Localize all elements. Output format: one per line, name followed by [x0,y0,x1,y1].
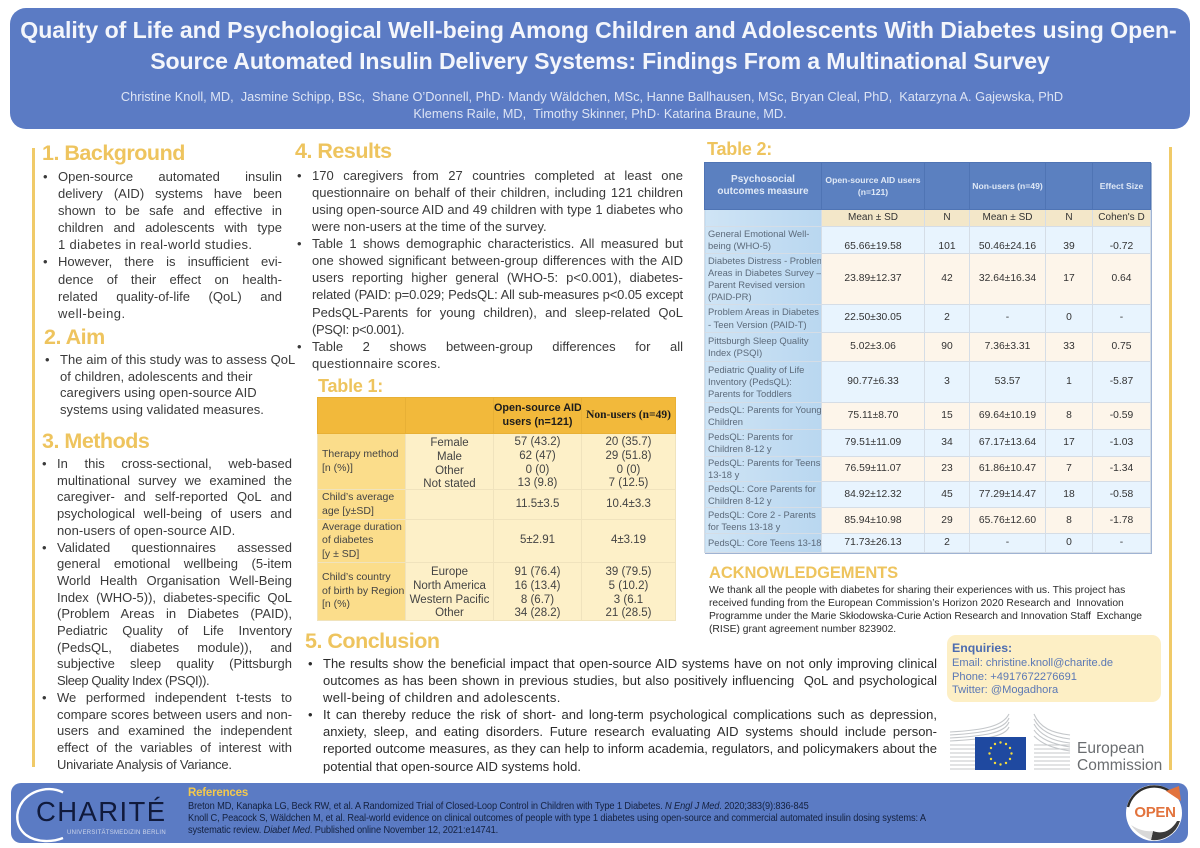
table 2: psychosocial outcomes: 7 [1066,463,1072,474]
table 2: psychosocial outcomes: 101 [938,241,956,252]
table 2: psychosocial outcomes: 8 [1066,410,1072,421]
logo: Charité: UNIVERSITÄTSMEDIZIN BERLIN [67,830,166,836]
table 2: psychosocial outcomes: -0.58 [1110,489,1133,500]
table 1: demographics: 13 (9.8) [518,477,557,489]
table 1: demographics: [n (%) [322,598,350,610]
table 2: psychosocial outcomes: 3 [944,376,950,387]
text: reference list: Breton MD, Kanapka LG, Beck RW, et al. A Randomized Trial of Closed-Loop Control in Children with Type 1 Diabetes. N Engl J Med. 2020;383(9):836-845 [188,800,809,812]
table 2: psychosocial outcomes: 34 [941,437,953,448]
text: aim bullet: systems using validated measures. [60,402,264,417]
table 2: psychosocial outcomes: 69.64±10.19 [979,410,1036,421]
table 2: psychosocial outcomes: - [1006,312,1009,323]
table 2: psychosocial outcomes: Diabetes Distress - Problem [708,255,822,266]
table 2: psychosocial outcomes: 79.51±11.09 [845,437,901,448]
table 2: psychosocial outcomes: PedsQL: Core Teens 13-18 [708,537,821,548]
table 2: psychosocial outcomes: 84.92±12.32 [844,489,902,500]
text: methods bullets: Validated questionnaires assessed [57,540,292,555]
table 2: psychosocial outcomes: 77.29±14.47 [979,489,1036,500]
table 2: psychosocial outcomes [704,162,1151,553]
table 1: demographics: Europe [431,566,468,578]
text: background bullets: children and adolescents with type [58,220,282,235]
logo: European Commission: European [1077,740,1144,757]
text: methods bullets: caregiver- and self-reported QoL and [57,489,292,504]
table 2: psychosocial outcomes: - [1006,537,1009,548]
table 1: demographics: 4±3.19 [611,534,646,546]
table 2: psychosocial outcomes: 0.75 [1111,341,1132,352]
table 2: psychosocial outcomes: 17 [1063,437,1075,448]
table 2: psychosocial outcomes: Mean ± SD [848,212,898,223]
table 1: demographics: 29 (51.8) [605,450,652,462]
text: results bullets: 170 caregivers from 27 countries completed at least one [312,168,683,183]
text: results bullets: using open-source AID and 49 children with type 1 diabetes who [312,202,683,217]
logo: Charité [16,788,167,842]
table 1: demographics: 20 (35.7) [605,436,652,448]
footer banner [11,783,1188,843]
text: results bullets: were non-users at the time of the survey. [312,219,547,234]
table 2: psychosocial outcomes: Effect Size [1100,181,1143,191]
table 2: psychosocial outcomes: - [1120,312,1123,323]
text: reference list [188,800,926,836]
table 2: psychosocial outcomes: PedsQL: Core Parents for [708,483,816,494]
logo: European Commission: Commission [1077,757,1162,774]
heading: acknowledgements: ACKNOWLEDGEMENTS [709,564,898,582]
heading: Table 2: Table 2: [707,139,772,159]
text: reference list: Knoll C, Peacock S, Wäldchen M, et al. Real-world evidence on clinical outcomes of people with type 1 diabetes using open-source and commercial automated insulin dosing systems: A [188,813,926,824]
text: methods bullets: World Health Organisation Well-Being [57,573,292,588]
text: conclusion bullets: outcomes as has been shown in previous studies, but also positively influencing QoL and psychological [323,673,937,688]
table 2: psychosocial outcomes: 53.57 [995,376,1020,387]
text: background bullets: related quality-of-life (QoL) and [58,289,282,304]
table 1: demographics: Therapy method [322,448,398,460]
table 2: psychosocial outcomes: PedsQL: Parents for [708,431,793,442]
heading: 2. Aim: 2. Aim [44,325,105,349]
table 2: psychosocial outcomes: Inventory (PedsQL): [708,376,792,387]
logo: European Commission [950,714,1162,774]
table 1: demographics: Child’s country [322,571,391,583]
table 2: psychosocial outcomes: 2 [944,537,950,548]
table 2: psychosocial outcomes: 45 [941,489,953,500]
table 1: demographics: users (n=121) [503,416,572,428]
table 2: psychosocial outcomes: 33 [1063,341,1075,352]
table 2: psychosocial outcomes: -5.87 [1110,376,1133,387]
text: methods bullets: Sleep Quality Index (PSQI)). [57,673,209,688]
table 2: psychosocial outcomes: 71.73±26.13 [844,537,902,548]
text: results bullets: questionnaire scores. [312,356,441,371]
table 2: psychosocial outcomes: 15 [941,410,953,421]
table 1: demographics: Open-source AID [494,402,582,414]
table 2: psychosocial outcomes: 22.50±30.05 [844,312,902,323]
table 1: demographics: Child’s average [322,491,394,503]
table 2: psychosocial outcomes: 85.94±10.98 [844,515,902,526]
table 2: psychosocial outcomes: 23 [941,463,953,474]
text: acknowledgements: Programme under the Marie Skłodowska-Curie Action Research and Innovation Staff Exchange [709,610,1142,622]
table 2: psychosocial outcomes: 17 [1063,273,1075,284]
table 2: psychosocial outcomes: for Teens 13-18 y [708,521,780,532]
text: methods bullets [42,456,292,772]
table 2: psychosocial outcomes: Psychosocial [731,174,795,185]
table 2: psychosocial outcomes: -0.59 [1110,410,1133,421]
text: aim bullet [46,352,295,417]
table 2: psychosocial outcomes: Parent Revised version [708,279,805,290]
table 2: psychosocial outcomes: 7.36±3.31 [985,341,1030,352]
text: results bullets [298,168,683,371]
table 1: demographics: 16 (13.4) [514,580,561,592]
text: background bullets: delivery (AID) systems have been [58,186,282,201]
table 1: demographics: 8 (6.7) [521,594,554,606]
authors: Klemens Raile, MD, Timothy Skinner, PhD· Katarina Braune, MD. [413,106,787,121]
table 2: psychosocial outcomes: Cohen's D [1098,212,1145,223]
text: background bullets: However, there is insufficient evi- [58,254,282,269]
text: methods bullets: subjective sleep quality (Pittsburgh [57,656,292,671]
text: conclusion bullets [308,656,937,774]
logo: Charité: CHARITÉ [36,796,167,827]
table 2: psychosocial outcomes: 13-18 y [708,469,739,480]
text: methods bullets: non-users of open-source AID. [57,523,235,538]
table 2: psychosocial outcomes: 65.76±12.60 [979,515,1036,526]
table 2: psychosocial outcomes: 67.17±13.64 [979,437,1036,448]
table 1: demographics: [n (%)] [322,462,353,474]
table 1: demographics: Other [435,607,464,619]
table 2: psychosocial outcomes: - Teen Version (PAID-T) [708,318,807,330]
text: background bullets: well-being. [58,306,126,321]
table 2: psychosocial outcomes: PedsQL: Parents for Teens [708,457,820,468]
table 2: psychosocial outcomes: 5.02±3.06 [850,341,896,352]
logo: OPEN [1126,785,1182,841]
text: methods bullets: Index (WHO-5)), diabetes-specific QoL [57,590,292,605]
text: aim bullet: of children, adolescents and their [60,369,252,384]
text: results bullets: Table 1 shows demographic characteristics. All measured but [312,236,683,251]
heading: references: References [188,787,248,799]
table 2: psychosocial outcomes: - [1120,537,1123,548]
table 1: demographics: 3 (6.1 [614,594,643,606]
table 2: psychosocial outcomes: outcomes measure [717,186,809,197]
authors: Christine Knoll, MD, Jasmine Schipp, BSc, Shane O’Donnell, PhD· Mandy Wäldchen, MSc, Hanne Ballhausen, MSc, Bryan Cleal, PhD, Katarzyna A. Gajewska, PhD [121,89,1063,104]
references [188,787,926,836]
table 2: psychosocial outcomes: 18 [1063,489,1075,500]
table 1: demographics: of birth by Region [322,585,404,597]
table 1: demographics: 0 (0) [617,464,640,476]
text: methods bullets: users and examined the independent [57,723,292,738]
table 2: psychosocial outcomes: 75.11±8.70 [848,410,898,421]
text: background bullets: shown to be safe and effective in [58,203,282,218]
table 2: psychosocial outcomes: 23.89±12.37 [844,273,902,284]
table 2: psychosocial outcomes: N [1065,212,1073,223]
table 1: demographics: Other [435,464,464,476]
table 1: demographics: 39 (79.5) [605,566,652,578]
logo: OPEN: OPEN [1134,804,1176,821]
text: methods bullets: general emotional wellbeing (5-item [57,556,292,571]
table 2: psychosocial outcomes: -1.78 [1110,515,1133,526]
table 2: psychosocial outcomes: 65.66±19.58 [844,241,902,252]
table 1: demographics: 7 (12.5) [609,477,648,489]
text: methods bullets: psychological well-being of users and [57,506,292,521]
text: results bullets: PedsQL-Parents for young children), and sleep-related QoL [312,304,683,320]
text: conclusion bullets: potential that open-source AID systems hold. [323,759,581,774]
heading: Table 1: Table 1: [318,376,383,396]
table 1: demographics [317,397,676,621]
text: methods bullets: effect of the variables of interest with [57,740,292,755]
table 1: demographics: 34 (28.2) [514,607,561,619]
table 1: demographics: of diabetes [322,534,373,546]
table 2: psychosocial outcomes: -0.72 [1110,241,1133,252]
text: methods bullets: multinational survey we examined the [57,473,292,488]
table 2: psychosocial outcomes: 1 [1066,376,1072,387]
table 2: psychosocial outcomes: 50.46±24.16 [979,241,1036,252]
table 2: psychosocial outcomes: 90.77±6.33 [847,376,899,387]
text: contact details: Twitter: @Mogadhora [952,684,1058,696]
table 2: psychosocial outcomes: Pittsburgh Sleep Quality [708,335,809,346]
table 2: psychosocial outcomes: 0 [1066,537,1072,548]
table 2: psychosocial outcomes: 0 [1066,312,1072,323]
authors [121,89,1063,121]
table 1: demographics: [y ± SD] [322,548,359,560]
table 1: demographics: Female [430,437,469,449]
text: methods bullets: (PedsQL, diabetes module)), and [57,640,292,655]
table 2: psychosocial outcomes: being (WHO-5) [708,240,771,251]
text: conclusion bullets: The results show the beneficial impact that open-source AID systems have on not only improving clinical [323,656,937,671]
text: background bullets: Open-source automated insulin [58,169,282,184]
text: acknowledgements [709,584,1142,634]
table 2: psychosocial outcomes: (PAID-PR) [708,291,752,302]
table 1: demographics: 91 (76.4) [514,566,561,578]
table 2: psychosocial outcomes: Areas in Diabetes Survey – [708,267,822,278]
text: methods bullets: (Problem Areas in Diabetes (PAID), [57,606,292,621]
table 1: demographics: Male [437,451,462,463]
heading: 1. Background: 1. Background [42,141,185,165]
table 1: demographics: 0 (0) [526,464,549,476]
table 1: demographics: 57 (43.2) [514,436,561,448]
text: acknowledgements: We thank all the people with diabetes for sharing their experiences with us. This project has [709,584,1125,596]
title [20,17,1177,74]
text: conclusion bullets: anxiety, sleep, and eating disorders. Future research evaluating AID systems should include person- [323,724,937,739]
table 1: demographics: Western Pacific [410,594,489,606]
table 2: psychosocial outcomes: 61.86±10.47 [979,463,1036,474]
text: methods bullets: We performed independent t-tests to [57,690,292,705]
table 2: psychosocial outcomes: General Emotional Well- [708,228,809,239]
table 1: demographics: 21 (28.5) [605,607,652,619]
text: results bullets: one showed significant between-group differences with the AID [312,253,683,268]
text: conclusion bullets: reported outcome measures, as they can help to inform academia, regulators, and policymakers about the [323,741,937,756]
table 1: demographics: 11.5±3.5 [516,498,559,510]
text: methods bullets: In this cross-sectional, web-based [57,456,292,471]
text: background bullets: 1 diabetes in real-world studies. [58,237,252,252]
table 2: psychosocial outcomes: 32.64±16.34 [979,273,1036,284]
text: conclusion bullets: It can thereby reduce the risk of short- and long-term psychological complications such as depression, [323,707,937,722]
table 2: psychosocial outcomes: 0.64 [1111,273,1132,284]
heading: 3. Methods: 3. Methods [42,429,149,453]
table 2: psychosocial outcomes: Children 8-12 y [708,495,772,506]
table 2: psychosocial outcomes: Mean ± SD [983,212,1032,223]
table 2: psychosocial outcomes: 76.59±11.07 [845,463,901,474]
table 2: psychosocial outcomes: 2 [944,312,950,323]
text: contact details [952,657,1113,696]
text: background bullets [44,169,282,321]
text: methods bullets: Pediatric Quality of Life Inventory [57,623,292,638]
text: acknowledgements: (RISE) grant agreement number 823902. [709,624,896,634]
table 2: psychosocial outcomes: 90 [941,341,953,352]
table 2: psychosocial outcomes: PedsQL: Parents for Young [708,404,822,415]
table 1: demographics: 5±2.91 [520,534,555,546]
table 2: psychosocial outcomes: Index (PSQI) [708,347,762,358]
table 2: psychosocial outcomes: PedsQL: Core 2 - Parents [708,509,816,520]
text: aim bullet: The aim of this study was to assess QoL [60,352,295,367]
text: results bullets: users reporting higher general (WHO-5: p<0.001), diabetes- [312,270,683,285]
table 2: psychosocial outcomes: N [943,212,951,223]
table 2: psychosocial outcomes: 39 [1063,241,1075,252]
text: results bullets: Table 2 shows between-group differences for all [312,339,683,354]
table 2: psychosocial outcomes: 8 [1066,515,1072,526]
table 2: psychosocial outcomes: Pediatric Quality of Life [708,364,804,375]
table 2: psychosocial outcomes: Children 8-12 y [708,443,772,454]
text: reference list: systematic review. Diabet Med. Published online November 12, 2021:e14741. [188,825,498,836]
table 2: psychosocial outcomes: Children [708,416,743,427]
table 2: psychosocial outcomes: 42 [941,273,953,284]
table 1: demographics: 10.4±3.3 [606,498,651,510]
text: contact details: Email: christine.knoll@charite.de [952,657,1113,669]
table 2: psychosocial outcomes: -1.34 [1110,463,1133,474]
heading: 5. Conclusion: 5. Conclusion [305,629,439,653]
text: background bullets: dence of their effect on health- [58,272,282,287]
panel: enquiries [947,635,1161,702]
text: acknowledgements: received funding from the European Commission’s Horizon 2020 Research and Innovation [709,598,1124,608]
text: aim bullet: caregivers using open-source AID [60,385,257,400]
table 2: psychosocial outcomes: Parents for Toddlers [708,388,792,399]
table 1: demographics: age [y±SD] [322,504,374,516]
table 1: demographics: North America [413,580,486,592]
table 1: demographics: 5 (10.2) [609,580,648,592]
text: methods bullets: Univariate Analysis of Variance. [57,757,232,772]
text: results bullets: questionnaire on behalf of their children, including 121 children [312,185,683,200]
table 1: demographics: 62 (47) [519,450,556,462]
title: Source Automated Insulin Delivery Systems: Findings From a Multinational Survey [150,48,1050,74]
table 1: demographics: Non-users (n=49) [586,409,671,421]
text: conclusion bullets: well-being of children and adolescents. [323,690,561,705]
title: Quality of Life and Psychological Well-being Among Children and Adolescents With Diabetes using Open- [20,17,1177,43]
text: results bullets: related (PAID: p=0.029; PedsQL: All sub-measures p<0.05 except [312,287,683,302]
heading: enquiries: Enquiries: [952,641,1012,655]
table 2: psychosocial outcomes: Open-source AID users [825,175,921,185]
text: methods bullets: compare scores between users and non- [57,707,292,722]
table 1: demographics: Average duration [322,521,402,533]
heading: 4. Results: 4. Results [295,139,392,163]
table 2: psychosocial outcomes: 29 [941,515,953,526]
text: contact details: Phone: +4917672276691 [952,671,1077,683]
table 2: psychosocial outcomes: Non-users (n=49) [972,181,1043,191]
table 2: psychosocial outcomes: Problem Areas in Diabetes [708,306,819,317]
table 2: psychosocial outcomes: (n=121) [858,187,888,197]
table 2: psychosocial outcomes: -1.03 [1110,437,1133,448]
header banner [10,8,1190,129]
text: results bullets: (PSQI: p<0.001). [312,322,404,337]
